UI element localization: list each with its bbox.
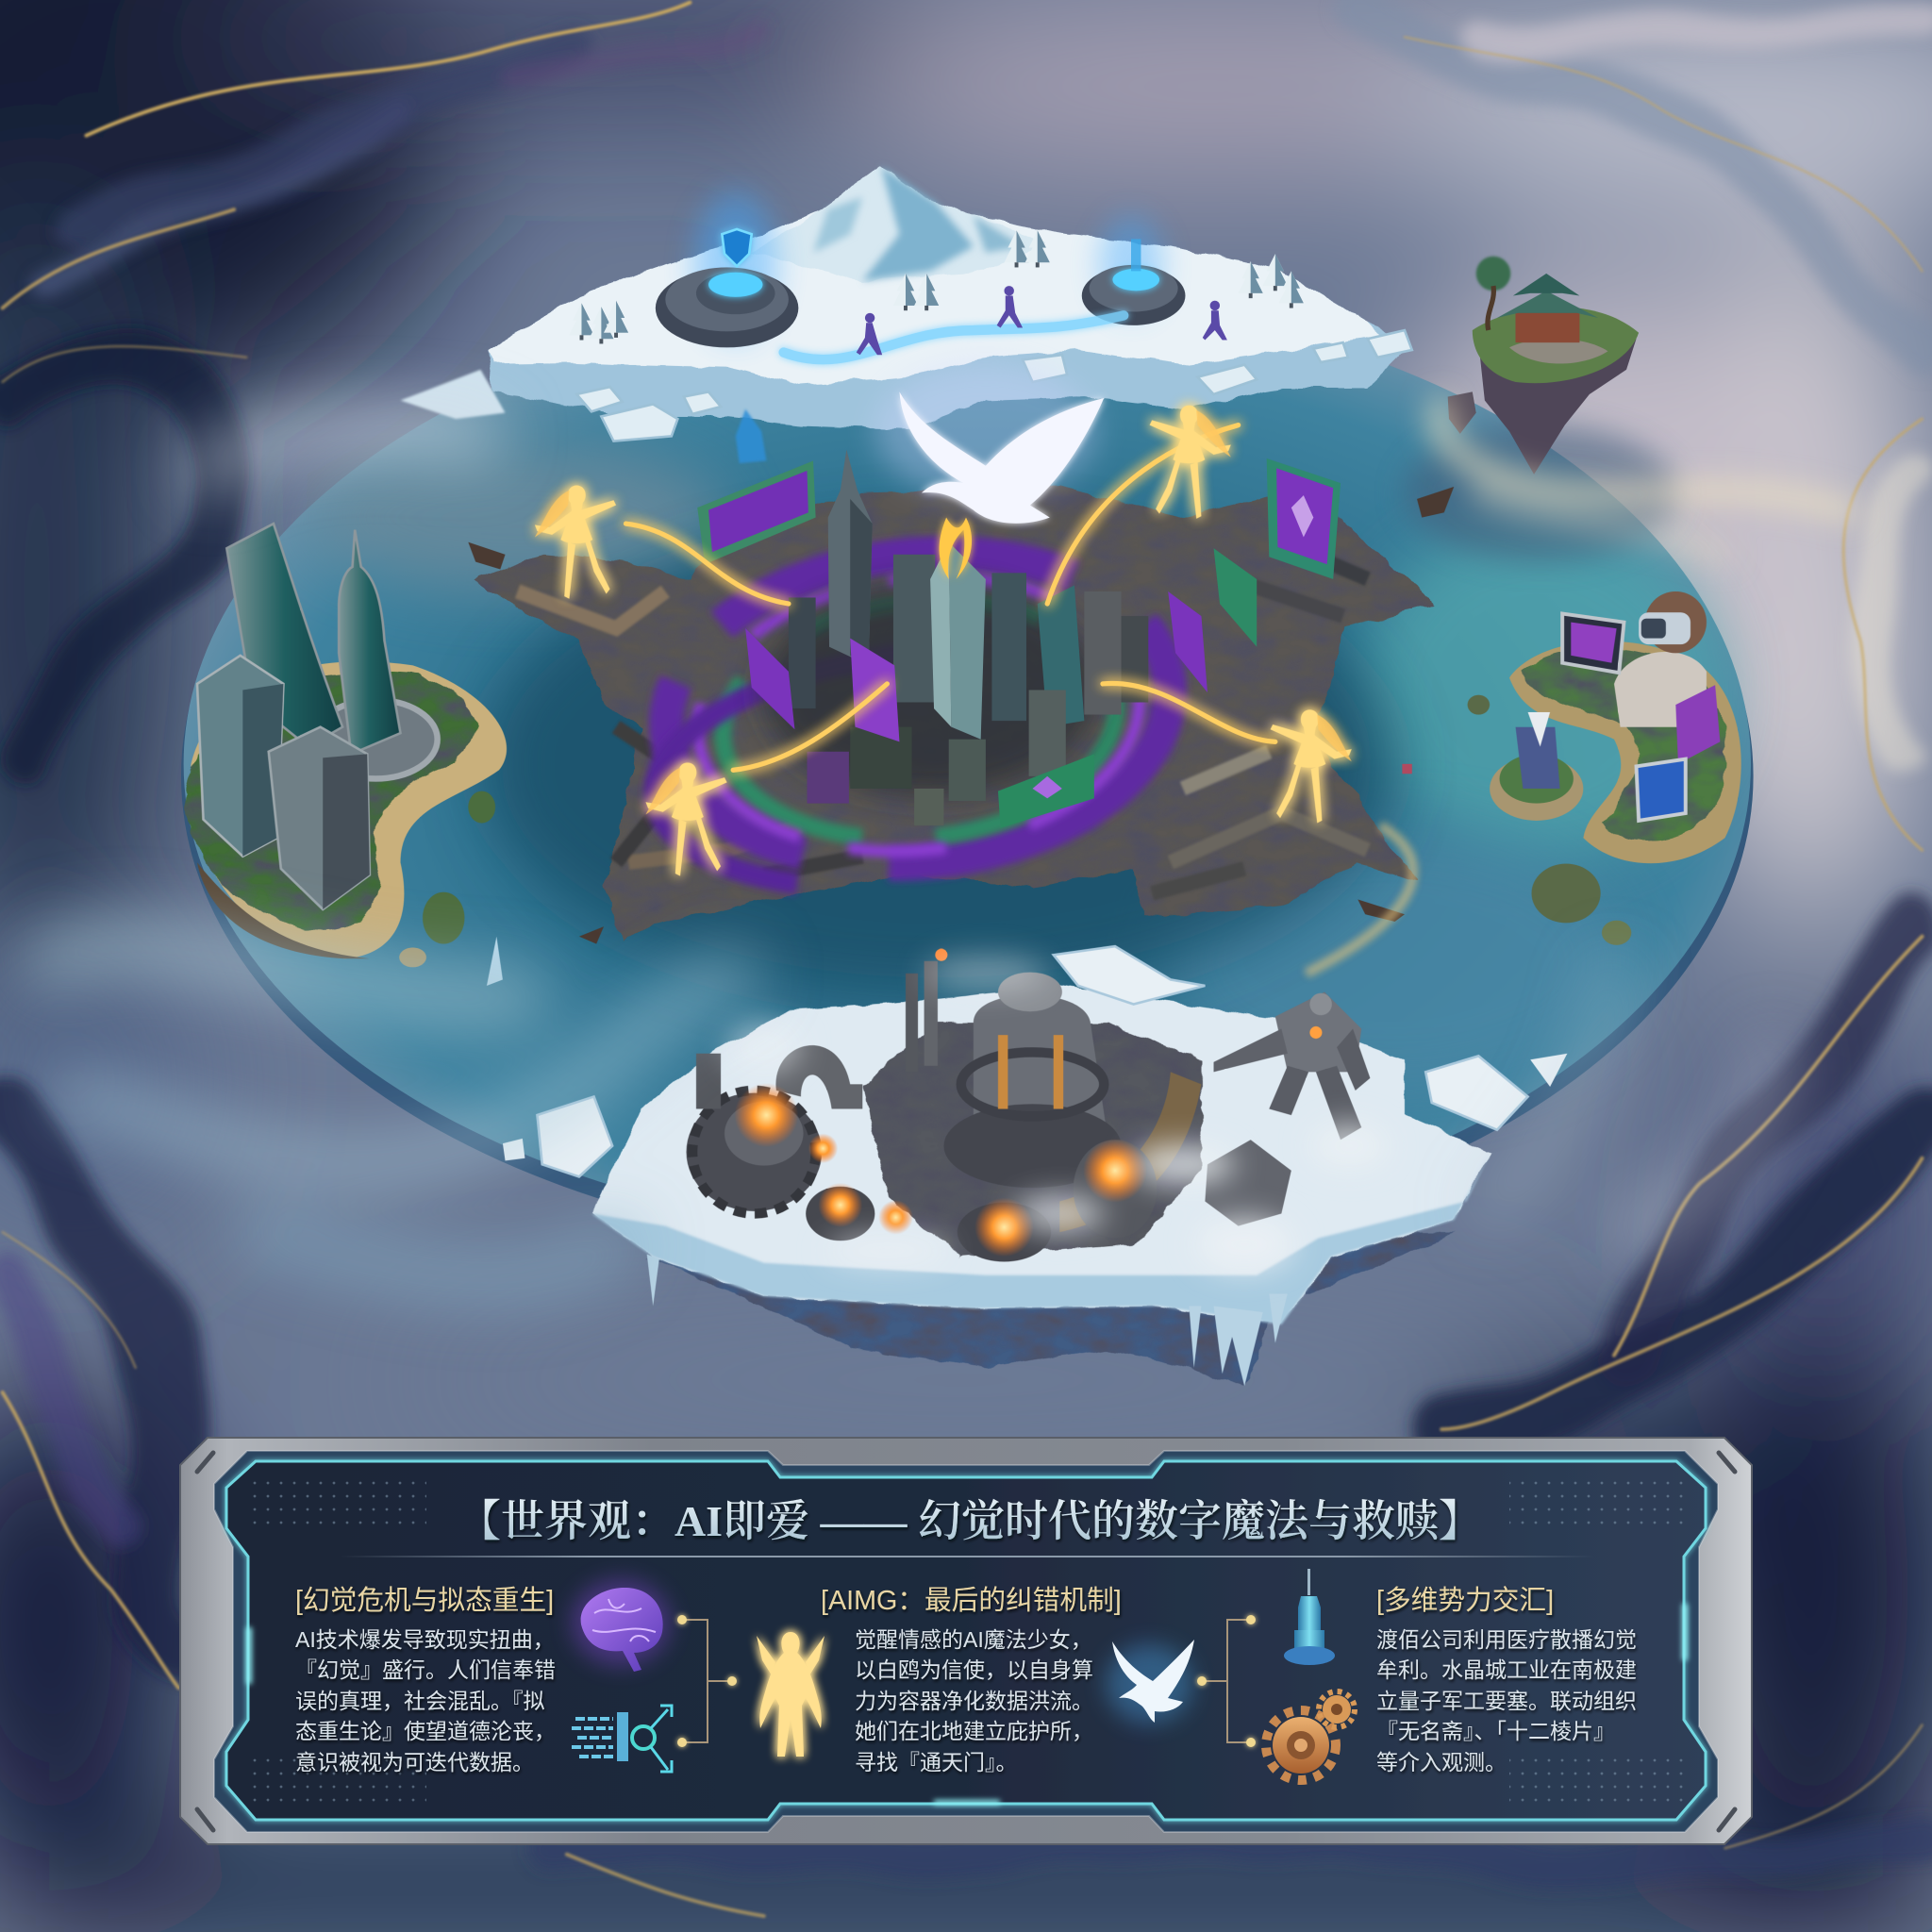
panel: cyan neon border [226,1461,1706,1820]
small ships [468,487,1454,943]
panel: metal frame [180,1438,1752,1844]
left main tower [226,524,342,746]
iceberg underside [647,1232,1454,1386]
icon: white gull [1106,1640,1194,1724]
body: column 2: 力为容器净化数据洪流。 [855,1689,1093,1713]
golden flame under dove [940,518,972,579]
blue crystal drip [736,409,766,463]
icon: medical syringe tower [1284,1569,1335,1665]
island: central ruined city [468,363,1454,974]
body: column 3 [1376,1627,1637,1774]
small green islets [399,791,503,986]
connector: left bracket [677,1615,737,1747]
island: floating pagoda [1448,257,1639,475]
purple and green corruption vortex [632,525,1219,914]
island: east VR archipelago [1468,591,1741,945]
glowing ice path [784,315,1124,359]
body: column 1: 『幻觉』盛行。人们信奉错 [295,1657,556,1682]
gold magic streams [625,425,1275,770]
body: column 2 [855,1627,1093,1774]
mech robot [1214,991,1370,1140]
column 1: illusion crisis [295,1586,556,1774]
machine fortress [686,949,1291,1261]
holo monitors [1516,613,1720,821]
body: column 3: 牟利。水晶城工业在南极建 [1376,1657,1637,1682]
icon: data stream chip [572,1706,672,1772]
front tower [269,727,370,909]
left lower tower [197,656,283,857]
iceberg top [591,986,1491,1324]
furnace glows [734,1083,1147,1257]
panel: glow accents [246,1604,1688,1805]
swirl glow around pagoda [1439,407,1848,555]
VR user figure [1614,591,1707,727]
column 2: AIMG [821,1586,1122,1774]
white dove messenger [874,363,1104,524]
holographic screens [697,458,1341,828]
snow mountain [752,166,1047,281]
right tower with spire [339,530,400,754]
body: column 3: 立量子军工要塞。联动组织 [1376,1689,1637,1713]
island: south fortress iceberg [503,946,1567,1386]
heading: column 1: [幻觉危机与拟态重生] [295,1586,554,1616]
heading: column 3: [多维势力交汇] [1376,1586,1554,1616]
gold magical girls [535,406,1352,876]
body: column 2: 觉醒情感的AI魔法少女， [855,1627,1092,1652]
west fort with blue shield [656,191,798,347]
snowy pine trees [569,230,1304,343]
connector: right bracket [1197,1615,1256,1747]
heading: column 2: [AIMG：最后的纠错机制] [821,1586,1122,1616]
body: column 1: AI技术爆发导致现实扭曲， [295,1627,555,1652]
icon: purple brain [572,1579,670,1672]
icon: bronze gears [1266,1691,1355,1780]
panel: dotted corner texture [247,1474,1684,1807]
info panel [180,1438,1752,1844]
disc: rim and ocean [181,291,1754,1255]
icon: golden magical girl [757,1632,824,1757]
south ice floes [503,946,1567,1176]
fog bands drifting across disc edge [49,428,1774,1277]
dark city core [764,585,1096,794]
rubble land mass [475,487,1436,942]
body: column 3: 等介入观测。 [1376,1750,1507,1774]
icicles [647,1255,1288,1386]
skyscrapers [789,450,1148,825]
body: column 2: 寻找『通天门』。 [855,1750,1017,1774]
body: column 1: 意识被视为可迭代数据。 [295,1750,534,1774]
panel: blue glass interior [214,1451,1718,1832]
ice floes [576,330,1412,441]
body: column 3: 『无名斋』、「十二棱片』 [1376,1719,1615,1743]
title: 【世界观：AI即爱 —— 幻觉时代的数字魔法与救赎】 [458,1497,1482,1545]
island: west crystal towers [185,524,507,986]
body: column 2: 她们在北地建立庇护所， [855,1719,1093,1743]
steam clouds [727,957,1389,1272]
map disc: ocean plate with all islands [49,166,1848,1386]
gold wake near south-east shore [1306,825,1413,974]
body: column 2: 以白鸥为信使，以自身算 [855,1657,1093,1682]
east fort with blue beacon [1082,216,1185,325]
scouts on the ice path [857,286,1227,355]
island: north snow fortress [400,166,1412,463]
body: column 3: 渡佰公司利用医疗散播幻觉 [1376,1627,1637,1652]
body: column 1: 误的真理，社会混乱。『拟 [295,1689,545,1713]
body: column 1 [295,1627,556,1774]
panel: corner slots [197,1453,1735,1830]
column 3: factions [1376,1586,1637,1774]
body: column 1: 态重生论』使望道德沦丧， [295,1719,556,1743]
